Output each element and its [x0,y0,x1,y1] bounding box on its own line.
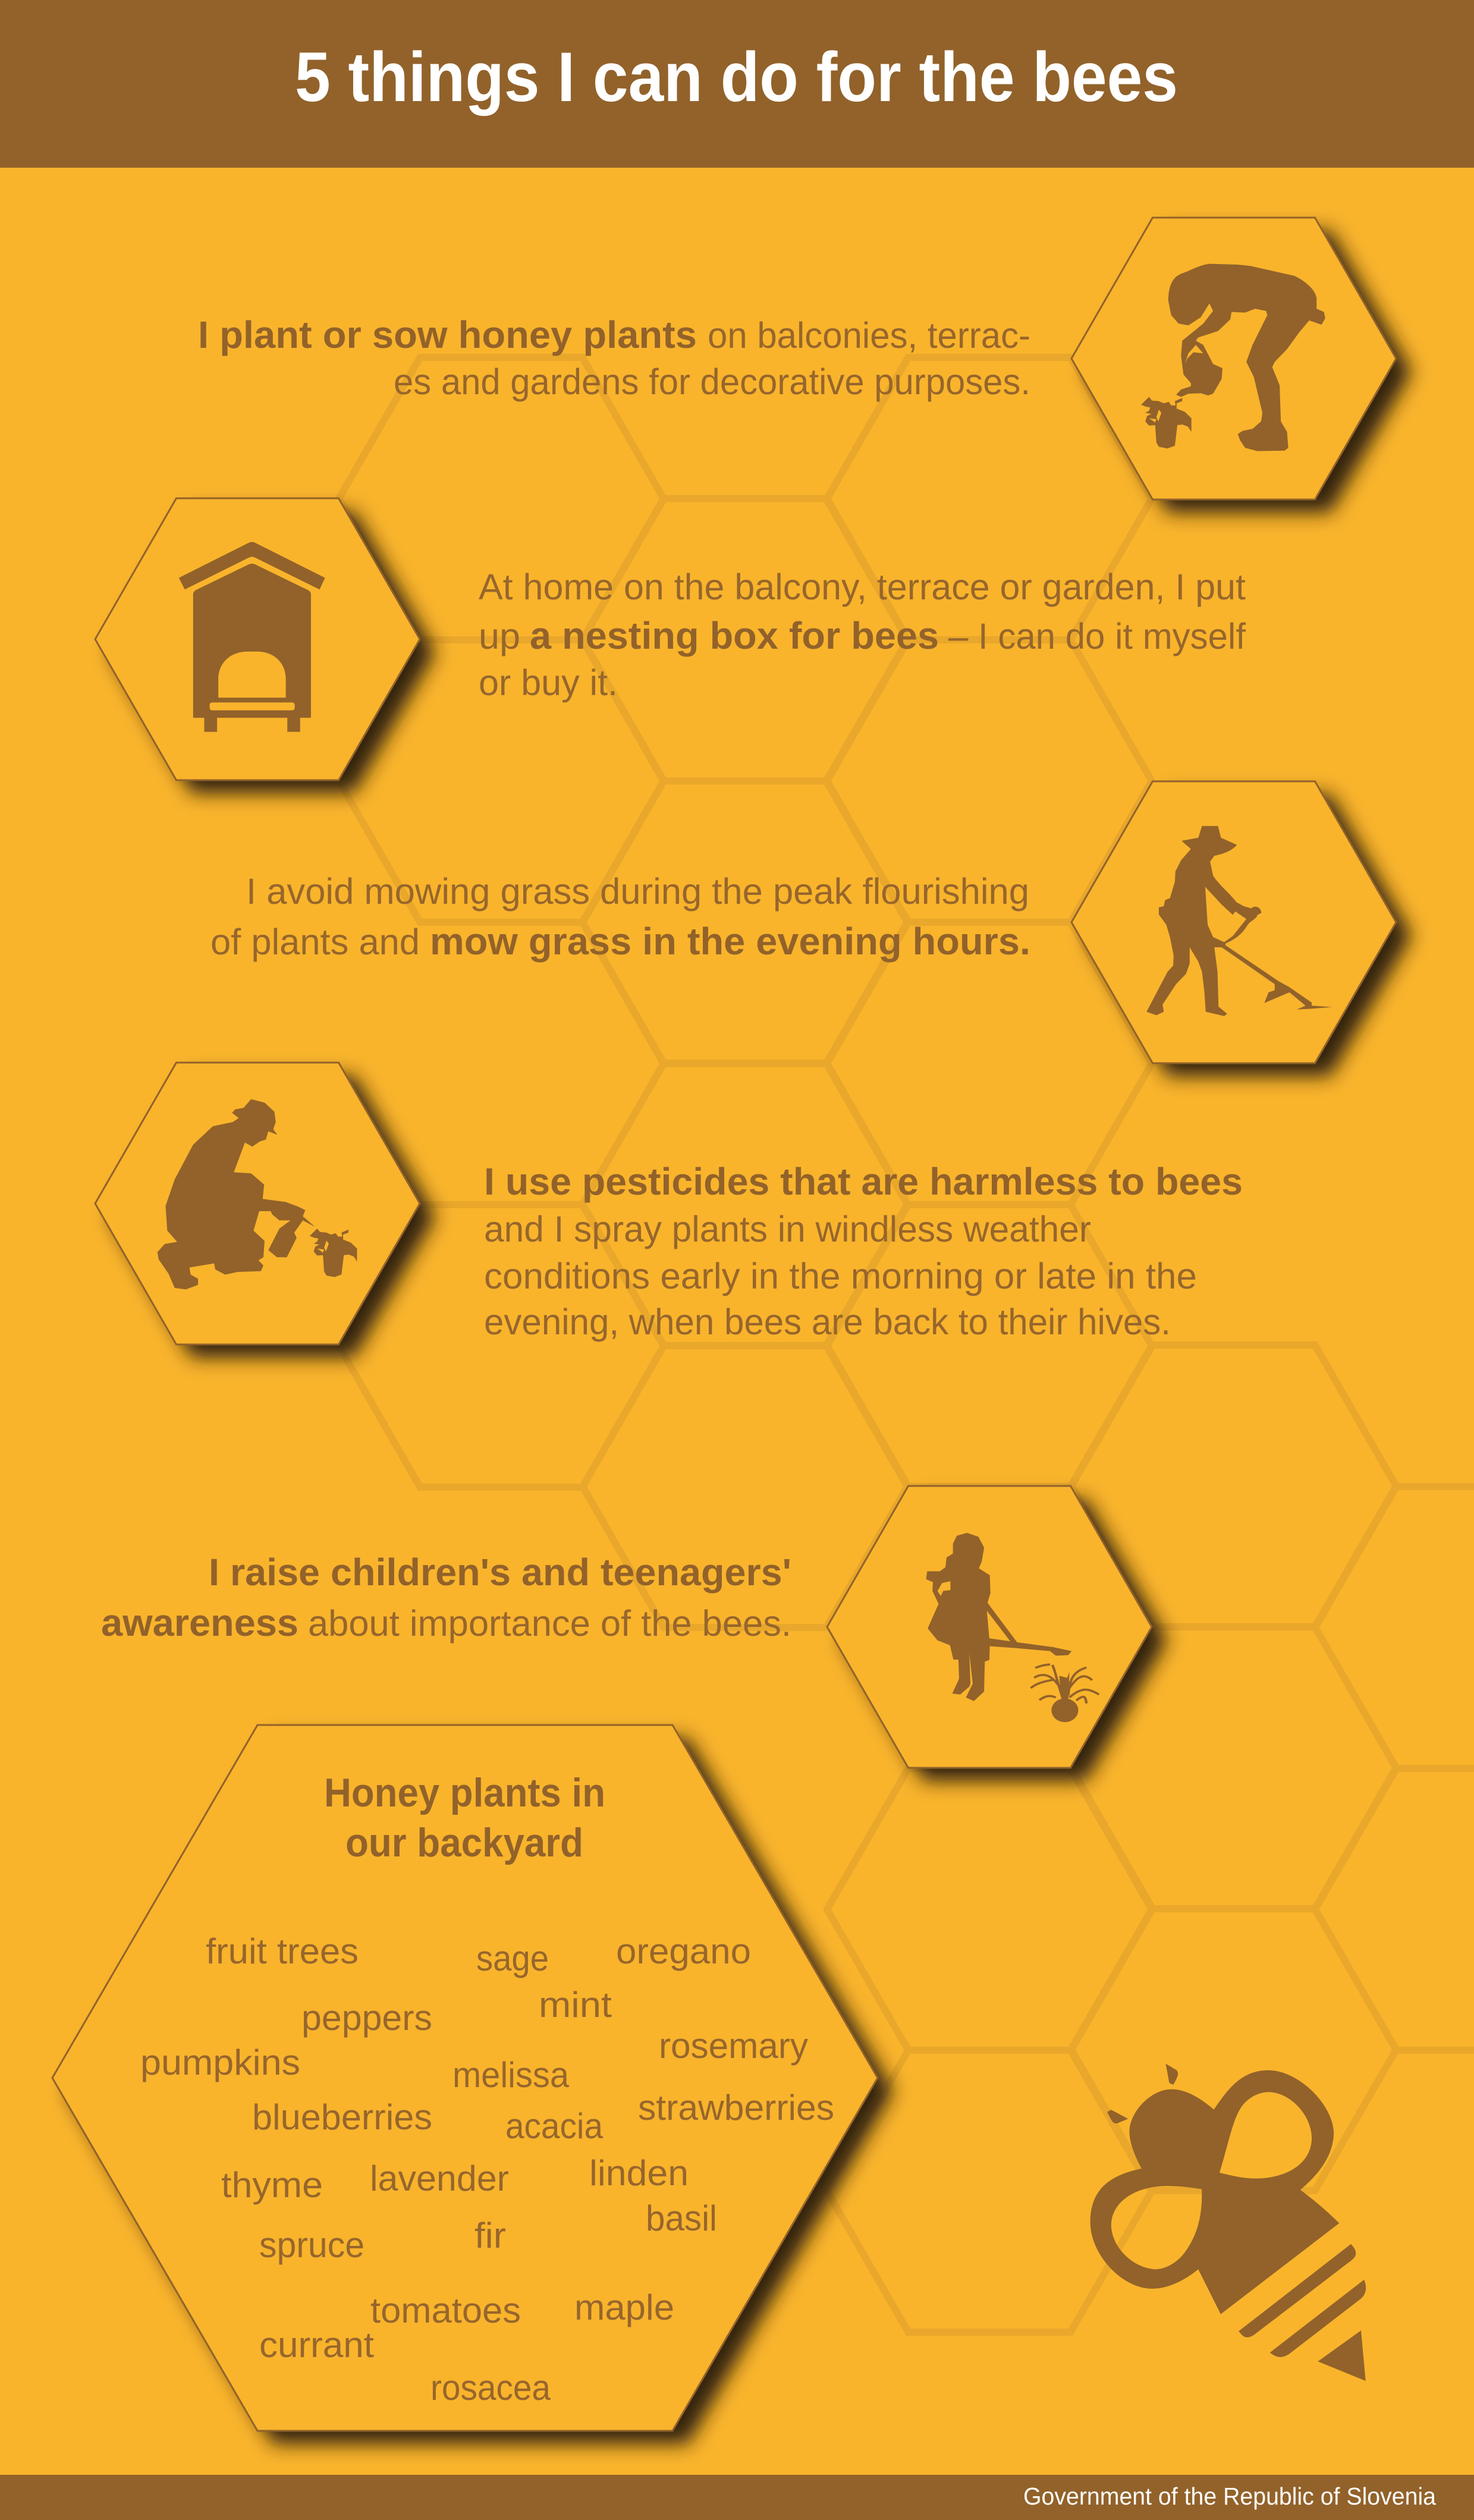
list of plants: oregano [616,1931,751,1971]
list of plants: spruce [259,2225,364,2265]
text: step 3: mow grass in the evening hours. [430,920,1030,963]
honeycomb pattern [339,357,1474,2332]
title bar [0,0,1474,168]
text: step 3: I avoid mowing grass during the peak flourishing [246,871,1029,912]
text: step 2 [479,567,1246,703]
text: step 4: I use pesticides that are harmless to bees [484,1160,1243,1203]
heading: honey plants: our backyard [345,1820,583,1865]
footer bar [0,2475,1474,2520]
list of plants: rosacea [430,2368,551,2408]
list of plants [140,1931,834,2408]
icon: potted plant [1141,397,1192,448]
text: step 4: evening, when bees are back to their hives. [484,1302,1171,1342]
icon: nesting box [179,542,325,732]
icon: potted plant [310,1228,357,1277]
list of plants: mint [539,1985,612,2025]
text: step 3: of plants and [210,922,420,962]
icon: small potted plant [1031,1664,1099,1722]
text: step 4: and I spray plants in windless weather [484,1209,1091,1249]
panel: honey plants [52,1725,893,2444]
list of plants: basil [646,2198,717,2238]
list of plants: lavender [370,2158,509,2198]
list of plants: peppers [301,1998,432,2038]
text: step 2: a nesting box for bees [530,614,939,657]
list of plants: fruit trees [206,1931,359,1971]
list of plants: acacia [505,2106,604,2146]
list of plants: maple [574,2288,674,2327]
text: step 1 [198,313,1030,402]
list of plants: strawberries [638,2088,834,2128]
panel: step 5 hexagon [827,1486,1167,1781]
list of plants: currant [259,2325,374,2365]
text: step 5: awareness [101,1601,298,1644]
text: step 5: about importance of the bees. [308,1603,791,1644]
list of plants: fir [474,2216,506,2255]
list of plants: pumpkins [140,2043,300,2082]
text: step 4: conditions early in the morning or late in the [484,1256,1197,1296]
heading: honey plants: Honey plants in [324,1770,605,1815]
list of plants: rosemary [659,2026,808,2066]
icon: bee [1090,2064,1366,2381]
panel: step 4 hexagon [95,1063,435,1358]
list of plants: sage [476,1938,549,1978]
icon: person spraying a plant [158,1099,357,1289]
text: step 5 [101,1551,791,1644]
list of plants: tomatoes [370,2290,521,2330]
list of plants: blueberries [252,2097,432,2137]
text: step 1: I plant or sow honey plants [198,313,697,356]
text: step 2: At home on the balcony, terrace or garden, I put [479,567,1246,607]
text: step 5: I raise children's and teenagers' [209,1551,791,1594]
list of plants: melissa [452,2055,570,2095]
text: step 2: or buy it. [479,662,618,703]
panel: step 3 hexagon [1071,781,1412,1076]
text: step 2: – I can do it myself [948,616,1246,656]
icon: person mowing grass [1146,826,1332,1016]
footer credit: Government of the Republic of Slovenia [1023,2483,1436,2510]
heading: honey plants [324,1770,605,1865]
title: 5 things I can do for the bees [295,38,1178,117]
text: step 4 [484,1160,1243,1342]
icon: child with watering can [926,1533,1099,1722]
panel: step 2 hexagon [95,498,435,793]
text: step 1: on balconies, terrac- [708,315,1030,356]
list of plants: linden [589,2153,689,2193]
text: step 1: es and gardens for decorative purposes. [394,362,1030,402]
text: step 2: up [479,616,520,656]
panel: step 1 hexagon [1071,218,1412,513]
text: step 3 [210,871,1030,963]
list of plants: thyme [221,2165,323,2205]
icon: person watering a plant [1141,264,1325,451]
